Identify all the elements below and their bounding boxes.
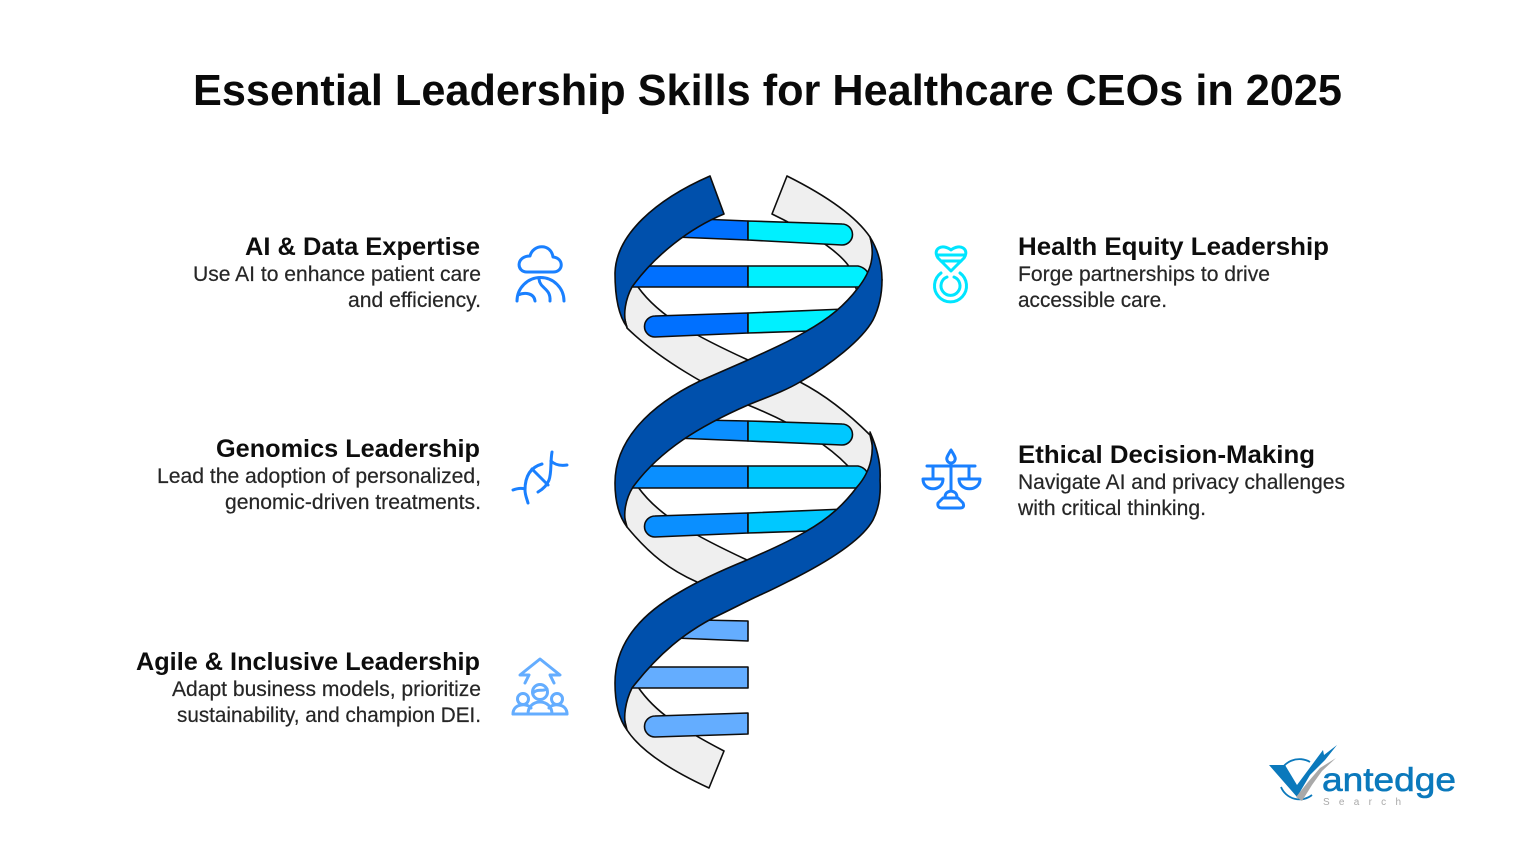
item: Ethical Decision-Making: Ethical Decision-Making [1018,441,1315,469]
item: Agile & Inclusive Leadership: Agile & Inclusive Leadership [136,648,480,676]
dark blue front strands [615,176,882,730]
grey back strands [620,176,882,788]
rungs: top group [630,219,869,337]
item: Agile & Inclusive Leadership [136,648,481,727]
logo: Vantedge Search: Search [1323,797,1401,808]
item: Agile & Inclusive Leadership: sustainability, and champion DEI. [177,704,481,727]
icon: heart medal [934,247,966,302]
icon: DNA [513,452,567,503]
icon: cloud and globe [517,247,564,301]
item: Health Equity Leadership: accessible care. [1018,289,1167,312]
item: Agile & Inclusive Leadership: Adapt business models, prioritize [172,678,481,701]
item: Genomics Leadership: Genomics Leadership [216,435,480,463]
item: Genomics Leadership: Lead the adoption of personalized, [157,465,481,488]
icon: scales [923,450,980,508]
logo: Vantedge Search [1269,745,1456,808]
item: Health Equity Leadership [1018,233,1329,312]
item: AI & Data Expertise: AI & Data Expertise [245,233,480,261]
title: Essential Leadership Skills for Healthcare CEOs in 2025 [193,66,1342,115]
item: Ethical Decision-Making: with critical thinking. [1017,497,1206,520]
item: Genomics Leadership: genomic-driven treatments. [225,491,481,514]
item: Ethical Decision-Making [1017,441,1345,520]
item: Health Equity Leadership: Health Equity Leadership [1018,233,1329,261]
DNA helix [615,176,882,788]
item: Health Equity Leadership: Forge partnerships to drive [1018,263,1270,286]
item: AI & Data Expertise [193,233,481,312]
item: AI & Data Expertise: and efficiency. [348,289,481,312]
item: Ethical Decision-Making: Navigate AI and privacy challenges [1018,471,1345,494]
rungs: bottom group [630,620,748,737]
item: AI & Data Expertise: Use AI to enhance patient care [193,263,481,286]
logo: Vantedge Search: antedge [1322,761,1456,798]
icon: team with arrow [513,659,567,714]
item: Genomics Leadership [157,435,481,514]
rungs: middle group [630,420,868,537]
